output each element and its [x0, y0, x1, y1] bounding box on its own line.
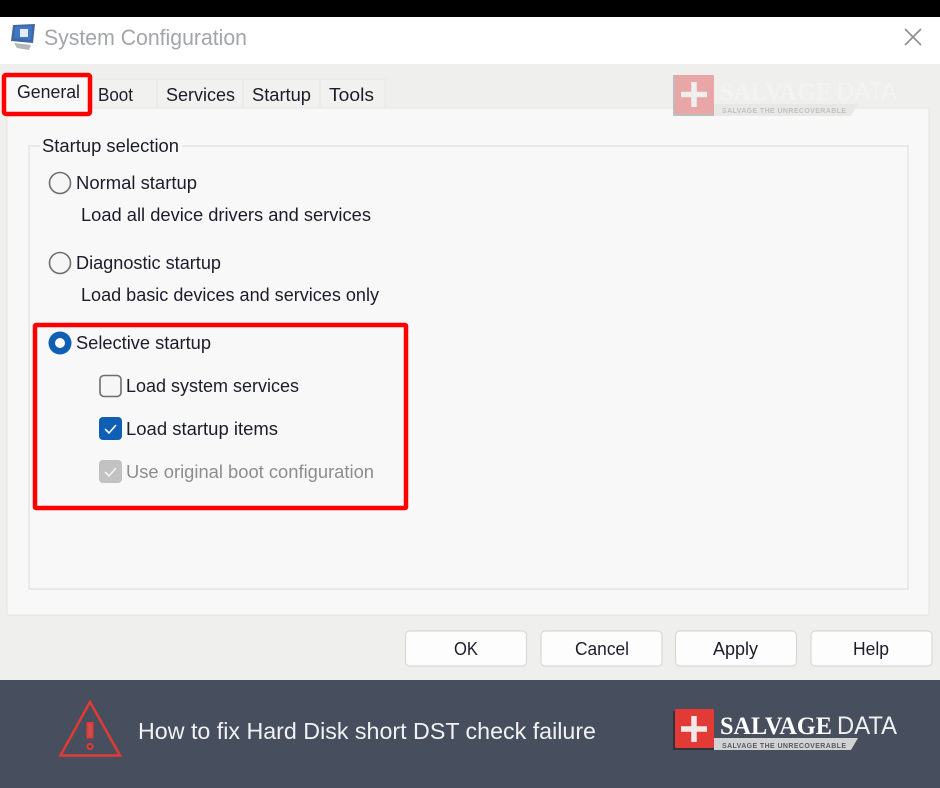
checkbox: use original boot configuration: Use original boot configuration: [126, 462, 374, 482]
option: diagnostic startup: Load basic devices and services only: [81, 285, 379, 305]
checkbox: load system services: Load system services: [126, 376, 299, 396]
button: Help: Help: [853, 639, 889, 659]
option: normal startup: Load all device drivers and services: [81, 205, 371, 225]
tab content panel: [6, 77, 929, 615]
highlight: general tab: [4, 75, 90, 114]
option: normal startup: Normal startup: [76, 173, 197, 193]
tab: Services: [157, 79, 243, 108]
icon: close: [905, 29, 921, 45]
tab: Tools: Tools: [329, 85, 374, 105]
tab: General: General: [17, 82, 80, 102]
tab: Startup: Startup: [252, 85, 311, 105]
logo: SalvageData: [673, 709, 897, 750]
icon: system configuration app: [11, 24, 35, 50]
logo: SalvageData: SALVAGE: [720, 713, 832, 740]
logo: SalvageData: SALVAGE THE UNRECOVERABLE: [722, 743, 846, 750]
option: diagnostic startup: Diagnostic startup: [76, 253, 221, 273]
buttons: [406, 631, 932, 666]
footer heading: How to fix Hard Disk short DST check failure: [138, 718, 596, 744]
footer banner: [0, 680, 940, 788]
highlight: selective startup options: [35, 325, 406, 508]
button: OK: [406, 631, 526, 666]
group box: startup selection: Startup selection: [42, 136, 179, 156]
tabs: [89, 79, 385, 108]
button: Cancel: [541, 631, 662, 666]
window title: System Configuration: [44, 25, 247, 50]
icon: warning triangle: [60, 702, 120, 756]
watermark logo: SALVAGE THE UNRECOVERABLE: [722, 108, 846, 115]
button: Cancel: Cancel: [575, 639, 629, 659]
top black bar: [0, 0, 940, 17]
button: Apply: [676, 631, 796, 666]
button: Apply: Apply: [713, 639, 758, 659]
button: OK: OK: [454, 639, 478, 659]
button: Help: [811, 631, 932, 666]
tab: Services: Services: [166, 85, 235, 105]
option: normal startup: [50, 172, 371, 225]
option: diagnostic startup: [50, 252, 379, 305]
option: selective startup: Selective startup: [76, 333, 211, 353]
watermark logo: SALVAGE: [720, 79, 832, 106]
watermark logo: [673, 75, 897, 116]
tab: Boot: [89, 79, 157, 108]
checkbox: load startup items: Load startup items: [126, 419, 278, 439]
tab: Boot: Boot: [98, 85, 133, 105]
watermark logo: DATA: [837, 78, 897, 106]
title bar: [0, 17, 940, 64]
tab: General: [6, 77, 88, 110]
tab: Startup: [243, 79, 320, 108]
logo: SalvageData: DATA: [837, 712, 897, 740]
tab: Tools: [320, 79, 385, 108]
